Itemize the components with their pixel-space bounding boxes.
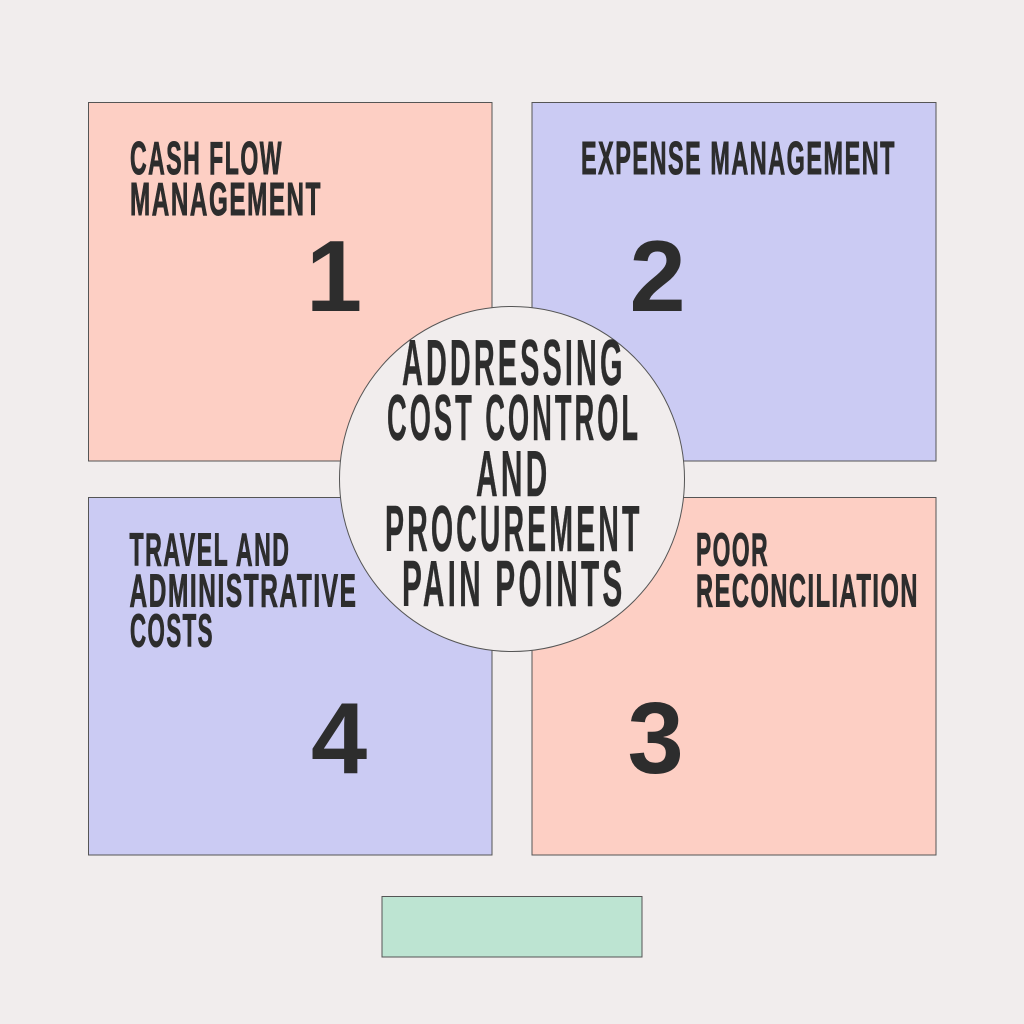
number 4: 4 bbox=[311, 683, 367, 795]
heading: travel and administrative costs bbox=[130, 524, 358, 656]
panel: poor reconciliation bbox=[532, 498, 936, 855]
heading: travel and administrative costs: TRAVEL AND bbox=[130, 524, 290, 576]
infographic: COST CONTROL bbox=[387, 381, 641, 454]
center circle title: ADDRESSING bbox=[402, 326, 626, 399]
number 2: 2 bbox=[630, 221, 686, 333]
center circle title: PROCUREMENT bbox=[385, 492, 642, 565]
heading: poor reconciliation: POOR bbox=[696, 524, 769, 576]
heading: travel and administrative costs: COSTS bbox=[130, 604, 214, 656]
heading: travel and administrative costs: ADMINISTRATIVE bbox=[130, 564, 358, 616]
center circle title bbox=[340, 306, 684, 652]
heading: cash flow management bbox=[130, 132, 322, 225]
panel: expense management bbox=[532, 102, 936, 461]
panel: cash flow management bbox=[88, 102, 492, 461]
mint empty box bbox=[382, 896, 642, 957]
heading: poor reconciliation bbox=[696, 524, 919, 616]
heading: cash flow management: MANAGEMENT bbox=[130, 173, 322, 225]
center circle title: PAIN POINTS bbox=[402, 547, 626, 620]
title: AND bbox=[476, 437, 550, 510]
panel: travel and administrative costs bbox=[88, 498, 492, 855]
heading: cash flow management: CASH FLOW bbox=[130, 132, 283, 184]
number 3: 3 bbox=[628, 683, 684, 795]
number 1: 1 bbox=[306, 221, 362, 333]
title bbox=[385, 326, 642, 620]
